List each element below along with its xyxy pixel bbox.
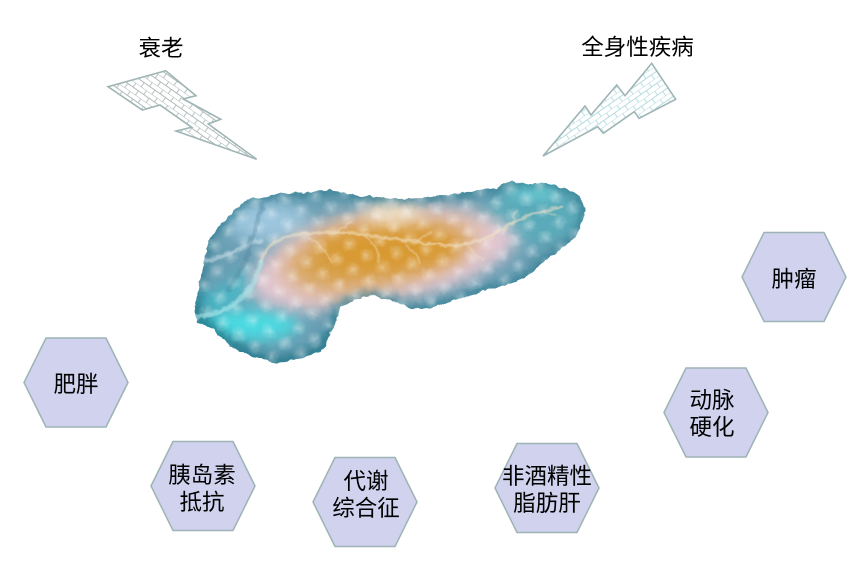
hexagon: 代谢综合征: 综合征 <box>332 496 400 521</box>
orange core <box>282 222 480 291</box>
hexagon: 肿瘤: 肿瘤 <box>771 267 817 292</box>
hexagon: 代谢综合征: 代谢 <box>343 469 389 494</box>
lightning bolt: left <box>108 71 257 159</box>
ducts and veins <box>197 205 562 317</box>
hexagon: 非酒精性脂肪肝: 脂肪肝 <box>513 491 581 516</box>
lobule dots <box>196 181 584 364</box>
hexagon: 非酒精性脂肪肝: 非酒精性 <box>502 464 592 489</box>
tail teal <box>485 185 585 245</box>
upper-left blue haze <box>226 202 310 242</box>
hexagon: 非酒精性脂肪肝 <box>495 444 599 532</box>
label: 衰老: 衰老 <box>138 36 184 61</box>
pink halo <box>248 205 520 311</box>
hexagon: 肥胖 <box>24 338 128 427</box>
dark rim shading <box>195 182 585 363</box>
hexagon: 肿瘤 <box>742 232 846 322</box>
hexagon: 动脉硬化: 硬化 <box>689 415 735 440</box>
hexagon: 胰岛素抵抗: 胰岛素 <box>168 463 236 488</box>
hexagon: 动脉硬化 <box>664 368 768 457</box>
lightning bolt: right <box>543 63 676 156</box>
hexagon: 动脉硬化: 动脉 <box>689 388 735 413</box>
label: 全身性疾病: 全身性疾病 <box>581 35 694 60</box>
hexagon: 代谢综合征 <box>313 458 417 546</box>
illustration: pancreas <box>194 180 586 364</box>
hexagon: 肥胖: 肥胖 <box>53 372 99 397</box>
head bright teal glow <box>196 309 300 341</box>
hexagon: 胰岛素抵抗 <box>151 442 255 530</box>
hexagon: 胰岛素抵抗: 抵抗 <box>179 490 225 515</box>
